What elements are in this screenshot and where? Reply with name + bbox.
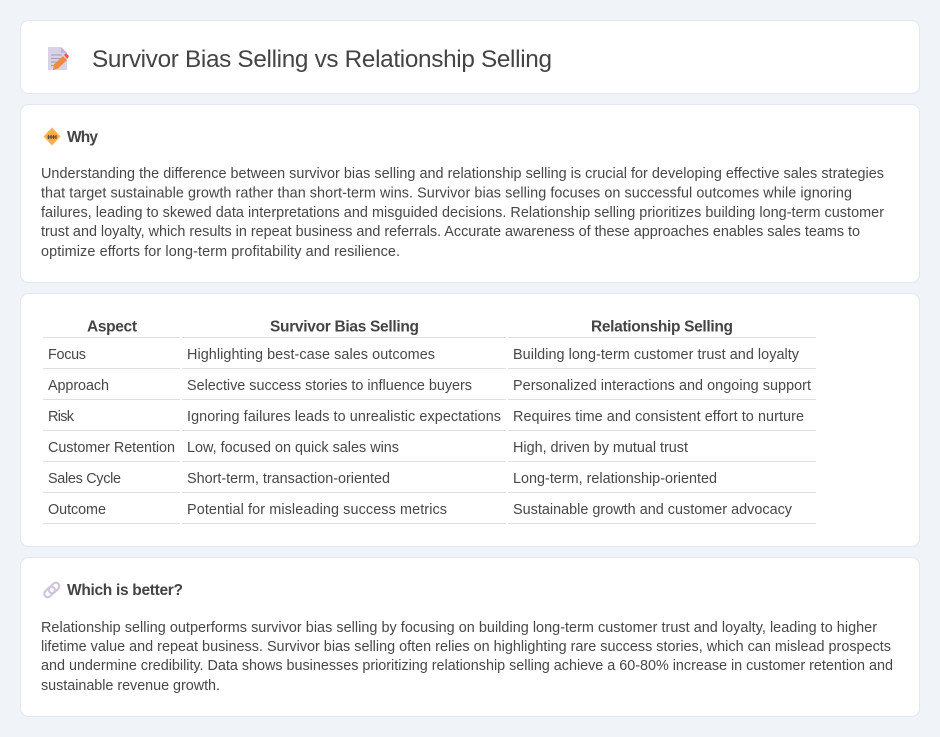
heading: why: Why bbox=[67, 129, 98, 146]
icon: chain link bbox=[43, 581, 61, 599]
table row: customer retention bbox=[48, 440, 688, 456]
table row: approach: Selective success stories to influence buyers bbox=[187, 378, 472, 394]
table row: risk: Risk bbox=[48, 409, 75, 425]
text block: why explanation: trust and loyalty, which results in repeat business and referrals. Accurate awareness of these approaches enables sales teams to bbox=[41, 224, 860, 240]
table row: focus bbox=[48, 347, 800, 363]
table row: sales cycle: Short-term, transaction-oriented bbox=[187, 471, 390, 487]
text block: why explanation bbox=[41, 166, 884, 260]
table row: risk: Ignoring failures leads to unrealistic expectations bbox=[187, 409, 501, 425]
table row: focus: Highlighting best-case sales outcomes bbox=[187, 347, 435, 363]
table row: customer retention: Low, focused on quick sales wins bbox=[187, 440, 399, 456]
text block: verdict: and undermine credibility. Data shows businesses prioritizing relationship selling achieve a 60-80% increase in customer retention and bbox=[41, 658, 893, 674]
table row: focus: Focus bbox=[48, 347, 86, 363]
table header row: Survivor Bias Selling bbox=[270, 318, 419, 336]
table row: outcome: Sustainable growth and customer advocacy bbox=[513, 502, 793, 518]
table row: focus: Building long-term customer trust and loyalty bbox=[513, 347, 800, 363]
table row: outcome: Outcome bbox=[48, 502, 106, 518]
table header row bbox=[87, 318, 733, 336]
table row: risk bbox=[48, 409, 804, 425]
table row: sales cycle: Sales Cycle bbox=[48, 471, 121, 487]
text block: verdict bbox=[41, 620, 893, 694]
table row: approach: Approach bbox=[48, 378, 109, 394]
text block: why explanation: that target sustainable growth rather than short-term wins. Survivor bias selling focuses on successful outcomes while ignoring bbox=[41, 186, 852, 202]
text block: why explanation: Understanding the difference between survivor bias selling and relationship selling is crucial for developing effective sales strategies bbox=[41, 166, 884, 182]
title: Survivor Bias Selling vs Relationship Selling bbox=[92, 46, 552, 73]
table row: customer retention: Customer Retention bbox=[48, 440, 175, 456]
text block: verdict: Relationship selling outperforms survivor bias selling by focusing on building long-term customer trust and loyalty, leading to higher bbox=[41, 620, 877, 636]
text block: verdict: lifetime value and repeat business. Survivor bias selling often relies on highlighting rare success stories, which can mislead prospects bbox=[41, 639, 891, 655]
table row: outcome: Potential for misleading success metrics bbox=[187, 502, 447, 518]
table row: approach: Personalized interactions and ongoing support bbox=[513, 378, 811, 394]
text block: why explanation: failures, leading to skewed data interpretations and misguided decisions. Relationship selling prioritizes building long-term customer bbox=[41, 205, 884, 221]
icon: document with pencil bbox=[48, 47, 69, 70]
panel: comparison table bbox=[20, 294, 920, 546]
table row: risk: Requires time and consistent effort to nurture bbox=[513, 409, 804, 425]
text block: why explanation: optimize efforts for long-term profitability and resilience. bbox=[41, 244, 400, 260]
heading: which is better: Which is better? bbox=[67, 582, 183, 599]
icon: warning diamond bbox=[44, 128, 60, 145]
table row: sales cycle bbox=[48, 471, 717, 487]
table row: sales cycle: Long-term, relationship-oriented bbox=[513, 471, 717, 487]
table row: approach bbox=[48, 378, 811, 394]
panel: why bbox=[20, 104, 920, 282]
table header row: Aspect bbox=[87, 318, 137, 336]
table header row: Relationship Selling bbox=[591, 318, 733, 336]
panel: which is better bbox=[20, 558, 920, 716]
panel: title header bbox=[20, 20, 920, 94]
text block: verdict: sustainable revenue growth. bbox=[41, 678, 220, 694]
table row: outcome bbox=[48, 502, 793, 518]
table row: customer retention: High, driven by mutual trust bbox=[513, 440, 688, 456]
